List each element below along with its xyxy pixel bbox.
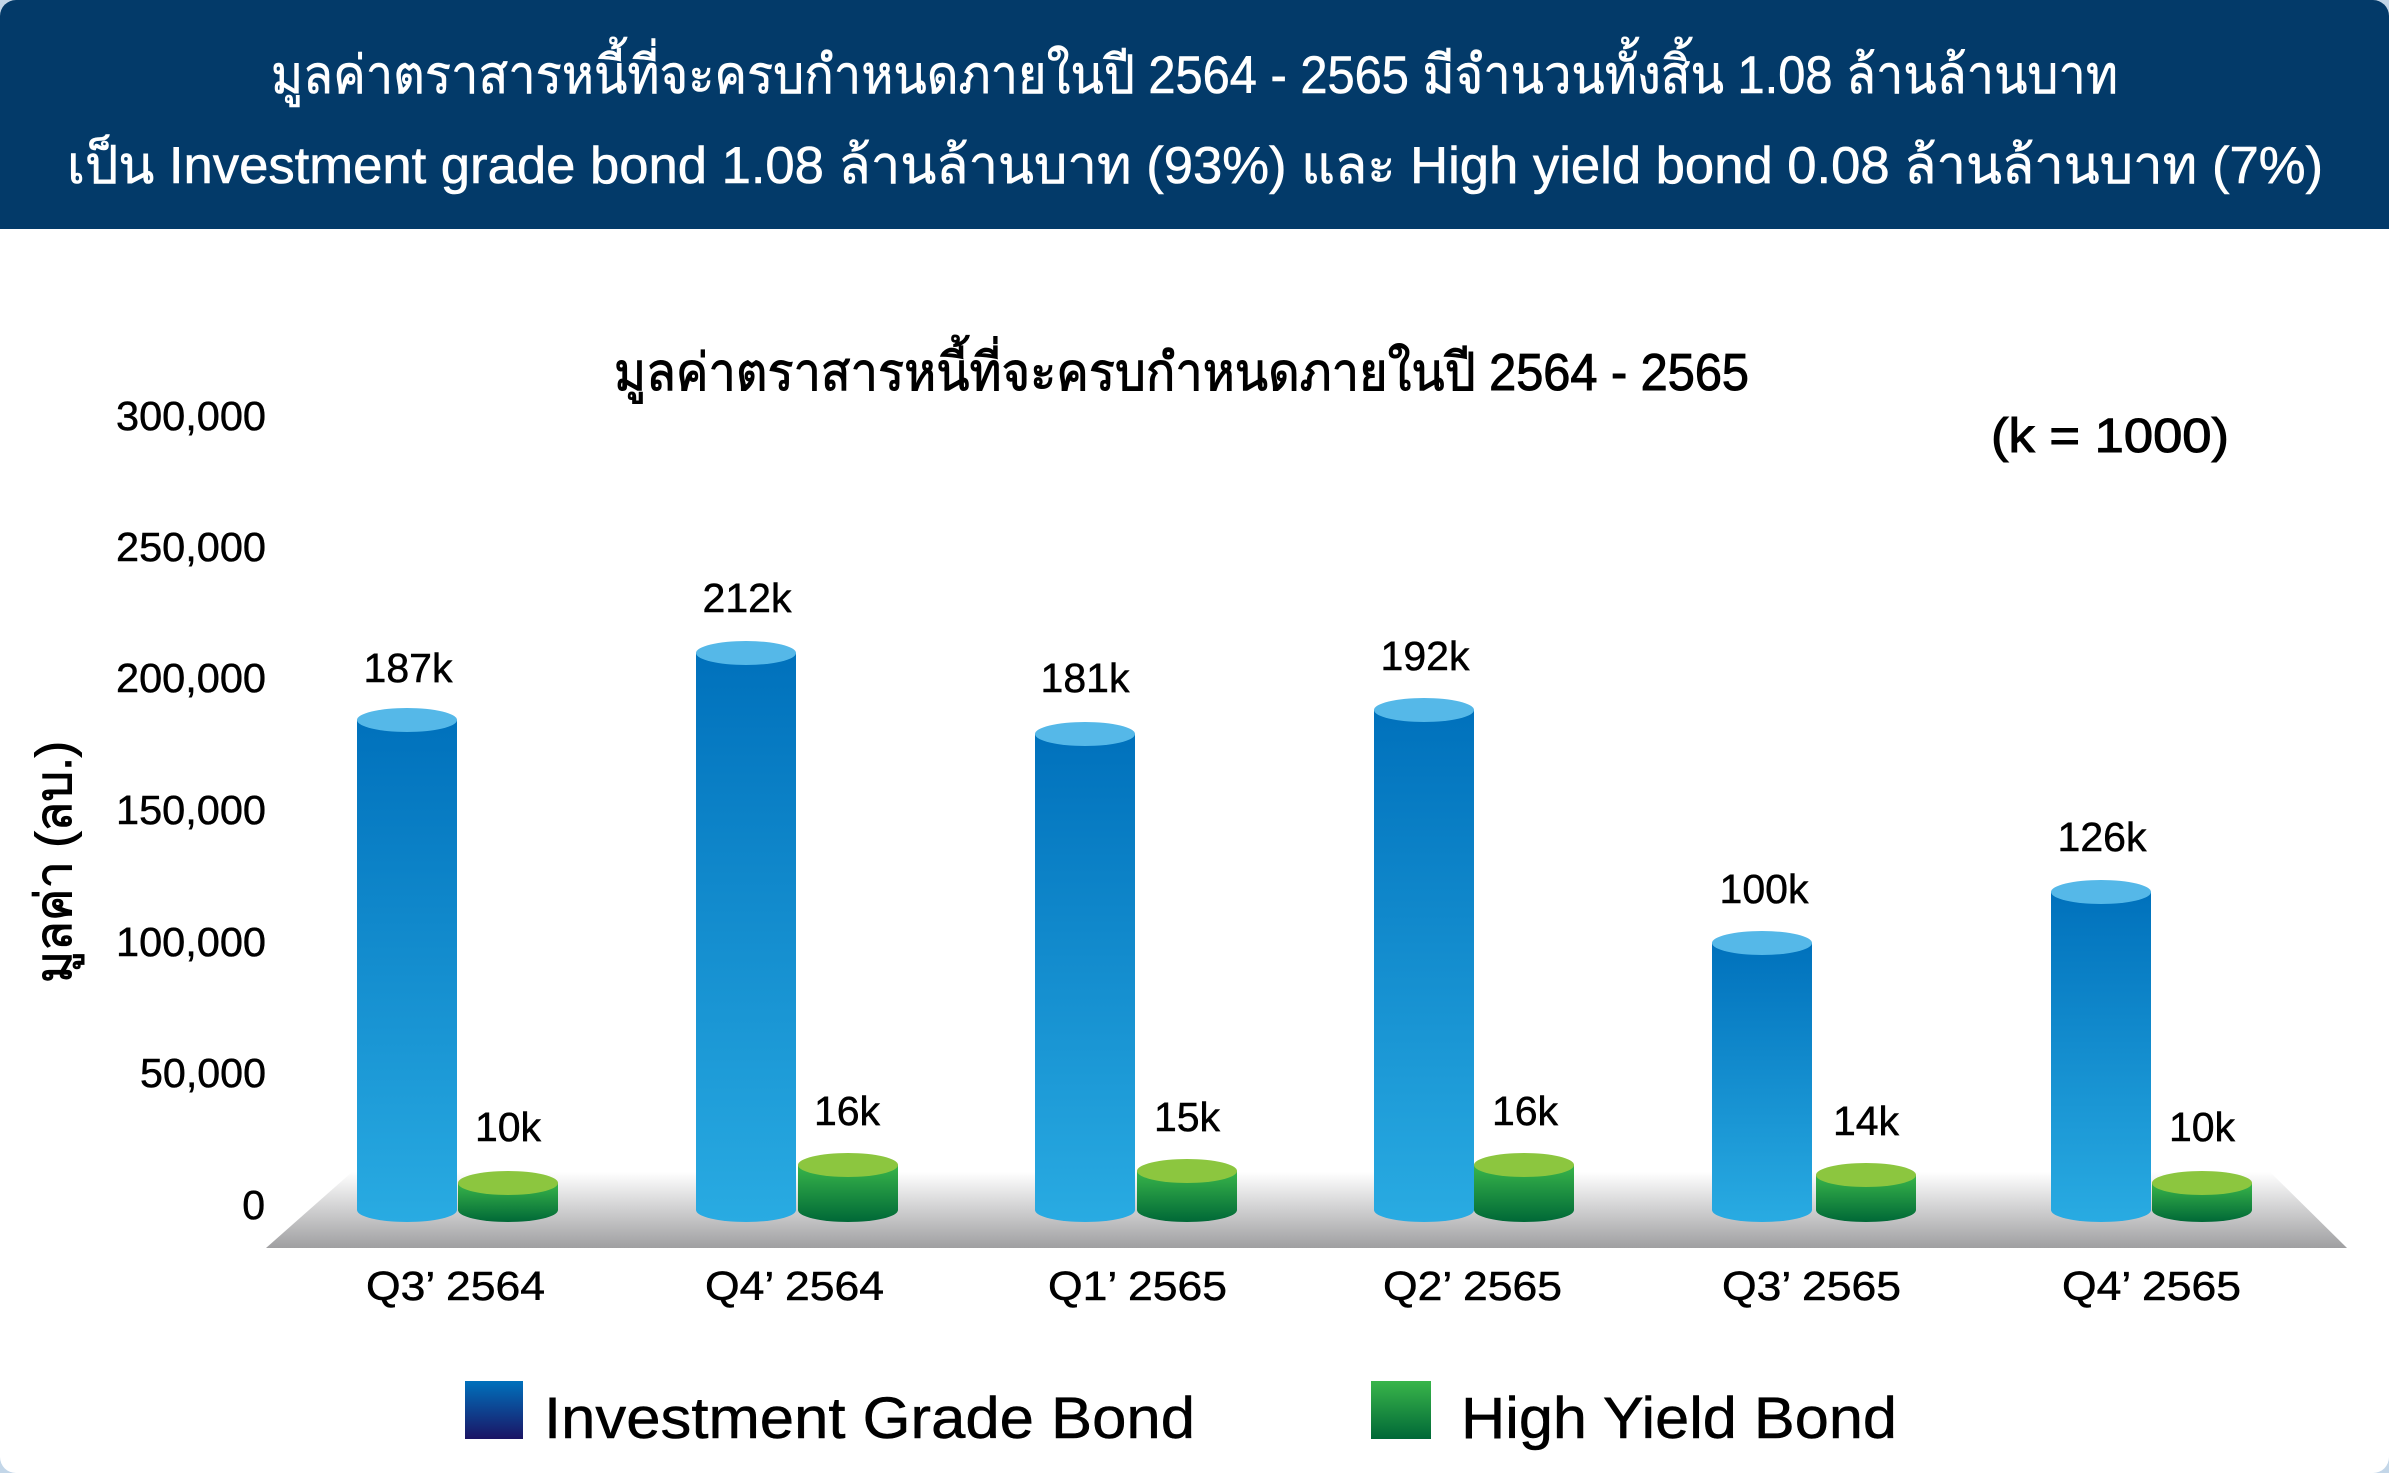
heading line 1: มูลค่าตราสารหนี้ที่จะครบกำหนดภายในปี 2564 - 2565 มีจำนวนทั้งสิ้น 1.08 ล้านล้านบาท [271, 37, 2118, 107]
x axis labels: Q4’ 2564 [705, 1263, 884, 1309]
bars: Q2 2565: 16k [1492, 1088, 1559, 1134]
legend: High Yield Bond: High Yield Bond [1461, 1386, 1897, 1451]
bars: Q4 2564 [696, 575, 898, 1222]
bars: Q1 2565: 181k [1041, 655, 1130, 701]
y axis labels: 250,000 [116, 524, 266, 570]
x axis labels [366, 1263, 2241, 1309]
unit note: (k = 1000) [1991, 410, 2229, 463]
bars: Q3 2565: 14k [1833, 1098, 1900, 1144]
chart floor [266, 1172, 2347, 1248]
x axis labels: Q2’ 2565 [1383, 1263, 1562, 1309]
y axis labels: 300,000 [116, 393, 266, 439]
y axis labels: 0 [242, 1182, 265, 1228]
bars: Q4 2565: 126k [2058, 814, 2147, 860]
chart title: มูลค่าตราสารหนี้ที่จะครบกำหนดภายในปี 2564 - 2565 [614, 335, 1749, 404]
bars: Q4 2564: 212k [703, 575, 792, 621]
heading line 2: เป็น Investment grade bond 1.08 ล้านล้านบาท (93%) และ High yield bond 0.08 ล้านล้านบาท (7%) [67, 135, 2323, 195]
bars: Q3 2564: 10k [475, 1104, 542, 1150]
bars: Q2 2565: 192k [1381, 633, 1470, 679]
y axis labels: 100,000 [116, 919, 266, 965]
bars: Q1 2565 [1035, 655, 1237, 1222]
y axis labels: 50,000 [140, 1050, 266, 1096]
header banner [0, 0, 2389, 229]
bars: Q1 2565: 15k [1154, 1094, 1221, 1140]
y axis labels [116, 393, 266, 1228]
bars: Q3 2565 [1712, 866, 1916, 1222]
bars: Q4 2564: 16k [814, 1088, 881, 1134]
bars: Q4 2565: 10k [2169, 1104, 2236, 1150]
bars: Q4 2565 [2051, 814, 2252, 1222]
x axis labels: Q4’ 2565 [2062, 1263, 2241, 1309]
y axis labels: 150,000 [116, 787, 266, 833]
bars: Q3 2564 [357, 645, 558, 1222]
bars: Q3 2565: 100k [1720, 866, 1809, 912]
y axis title: มูลค่า (ลบ.) [26, 741, 84, 983]
x axis labels: Q3’ 2565 [1722, 1263, 1901, 1309]
legend: Investment Grade Bond: Investment Grade Bond [544, 1386, 1195, 1451]
bars: Q3 2564: 187k [364, 645, 453, 691]
bars: Q2 2565 [1374, 633, 1574, 1222]
y axis labels: 200,000 [116, 655, 266, 701]
x axis labels: Q1’ 2565 [1048, 1263, 1227, 1309]
x axis labels: Q3’ 2564 [366, 1263, 545, 1309]
